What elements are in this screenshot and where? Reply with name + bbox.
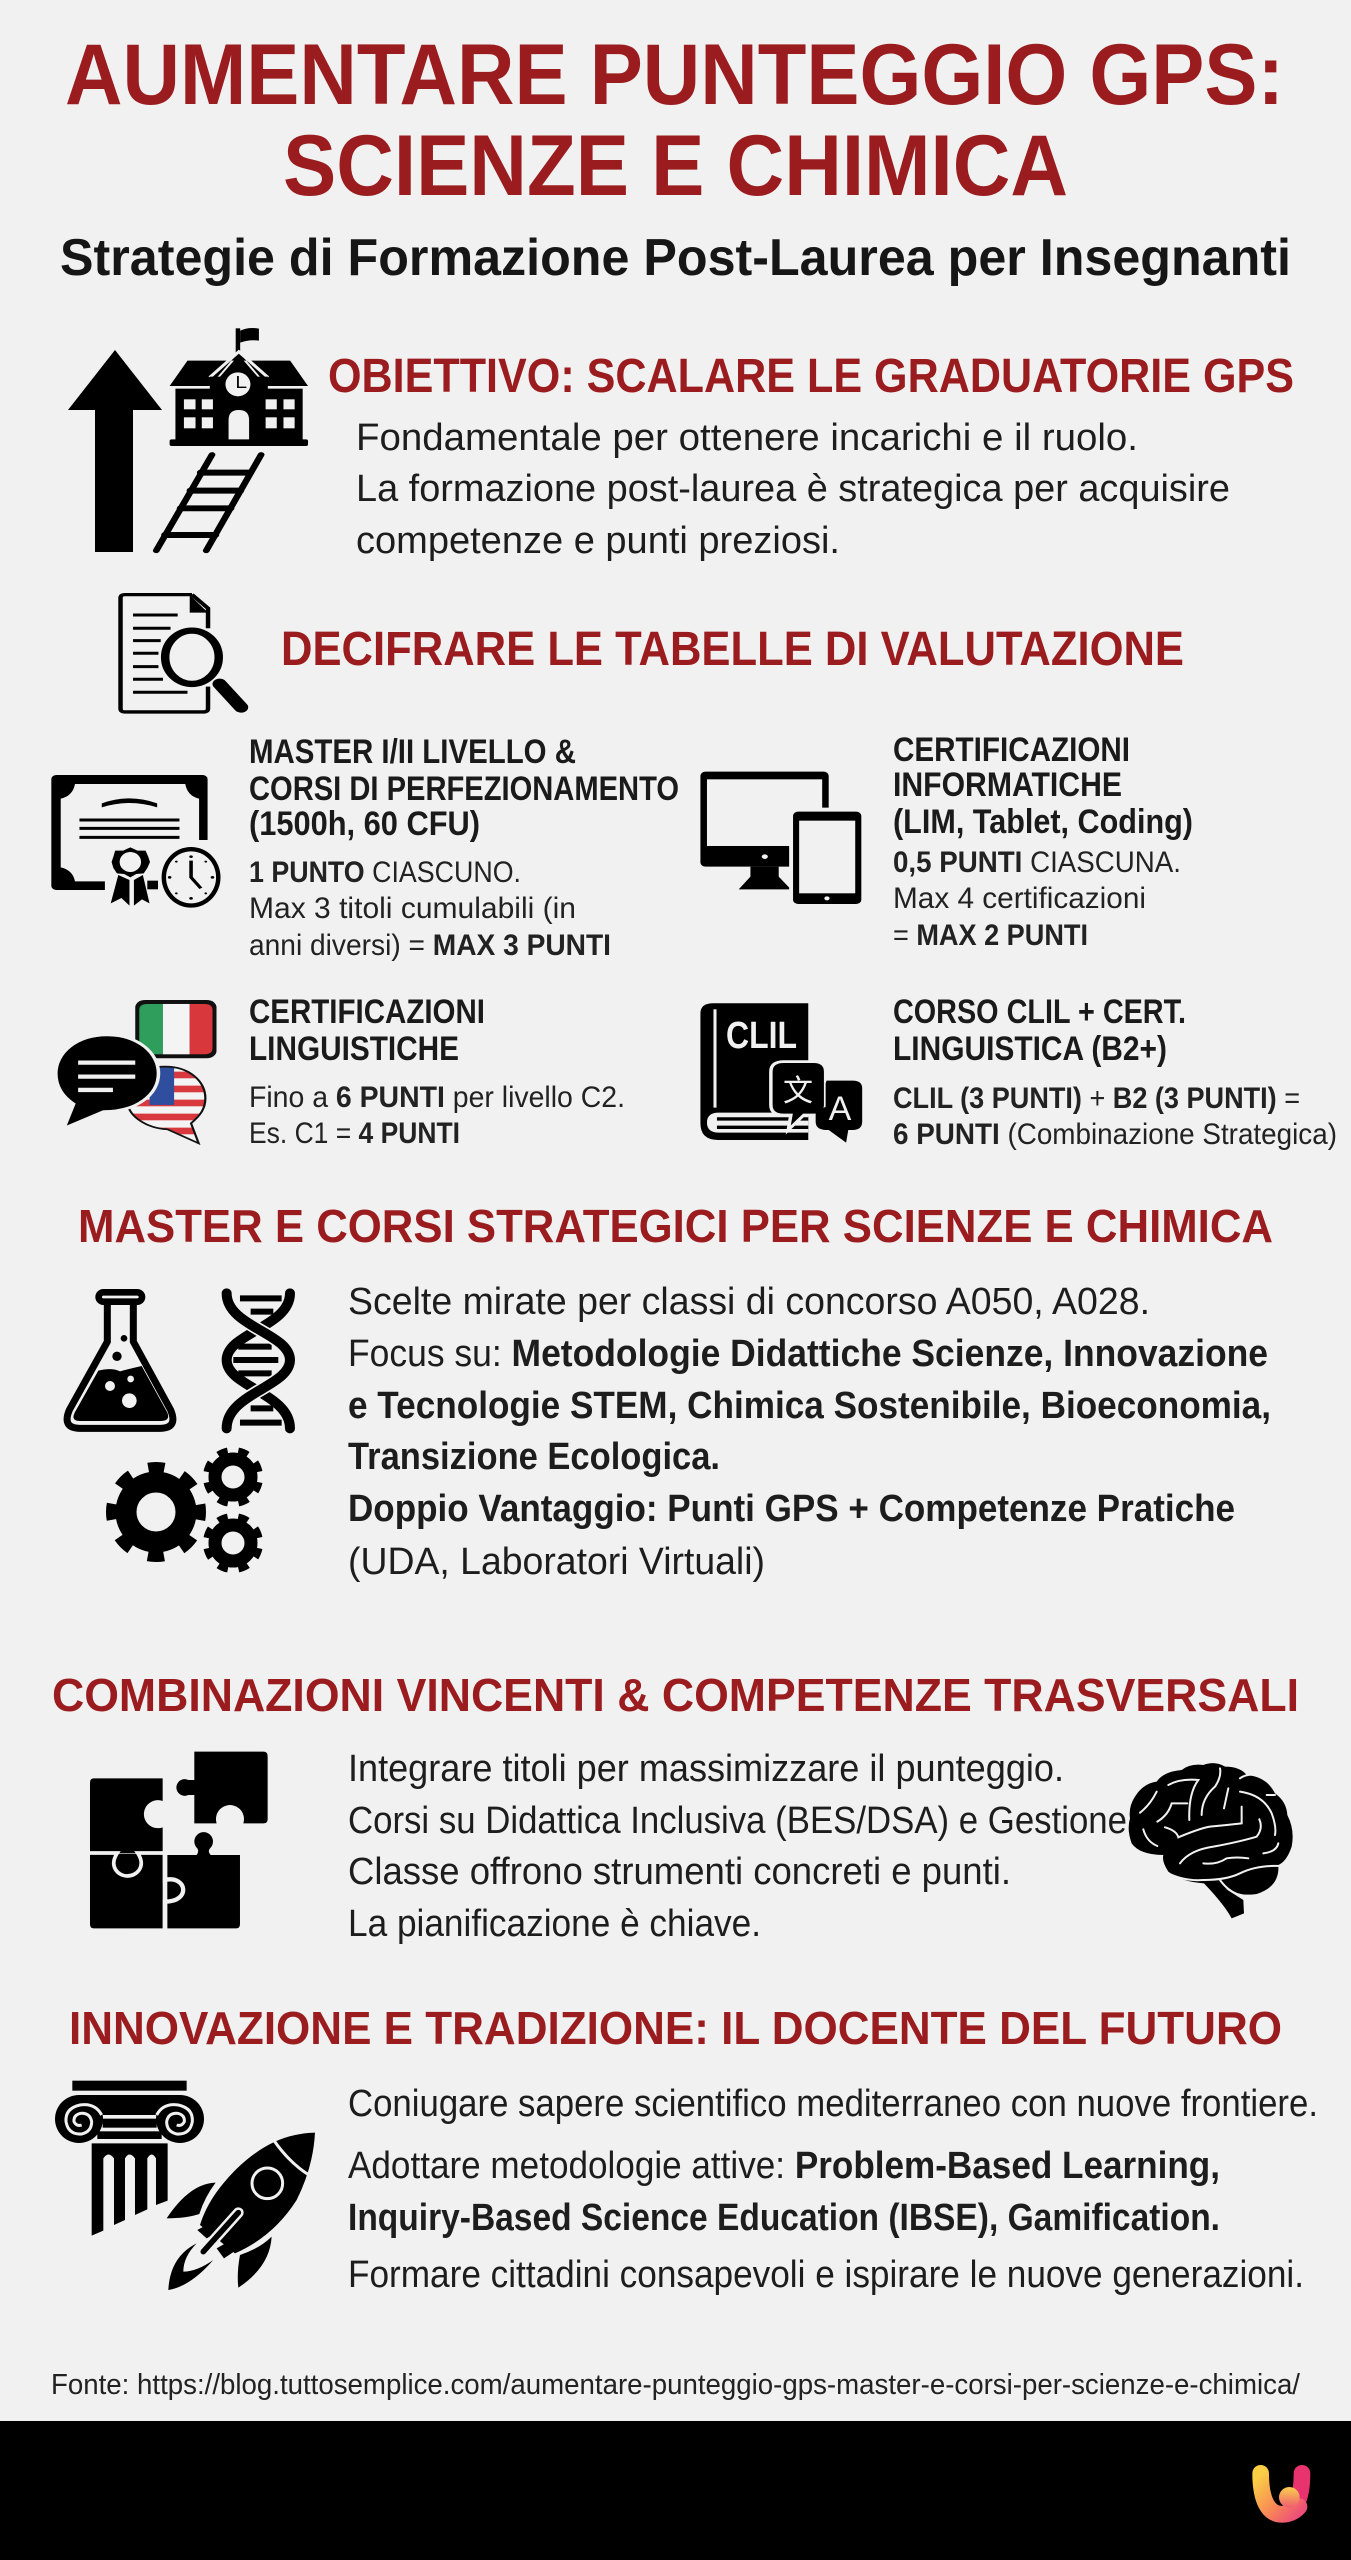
card text: linguistiche — [249, 1081, 625, 1150]
card text: master: 1 PUNTO CIASCUNO. — [249, 856, 521, 889]
card title: master: MASTER I/II LIVELLO & — [249, 733, 576, 771]
text block: combinazioni — [348, 1748, 1127, 1945]
card: corso clil — [700, 993, 1337, 1151]
source line: Fonte: https://blog.tuttosemplice.com/aumentare-punteggio-gps-master-e-corsi-per-scienze-e-chimica/ — [51, 2369, 1301, 2401]
text block: combinazioni: Classe offrono strumenti concreti e punti. — [348, 1851, 1011, 1893]
heading: innovazione: INNOVAZIONE E TRADIZIONE: IL DOCENTE DEL FUTURO — [69, 2002, 1282, 2054]
card title: linguistiche: LINGUISTICHE — [249, 1030, 459, 1068]
text block: combinazioni: Integrare titoli per massimizzare il punteggio. — [348, 1748, 1064, 1790]
text block: innovazione: Adottare metodologie attive: Problem-Based Learning, — [348, 2145, 1220, 2187]
card title: informatiche: INFORMATICHE — [893, 766, 1122, 804]
heading: master e corsi: MASTER E CORSI STRATEGICI PER SCIENZE E CHIMICA — [78, 1200, 1273, 1252]
icon: CLIL book with translation bubbles: 文 — [783, 1075, 813, 1108]
card title: informatiche — [893, 731, 1193, 841]
icon: puzzle — [90, 1752, 268, 1930]
card: certificazioni linguistiche — [56, 993, 625, 1150]
text block: master e corsi: Focus su: Metodologie Didattiche Scienze, Innovazione — [348, 1333, 1268, 1375]
card title: clil: CORSO CLIL + CERT. — [893, 993, 1186, 1031]
card title: clil — [893, 993, 1186, 1068]
card text: informatiche: = MAX 2 PUNTI — [893, 919, 1088, 952]
card: certificazioni informatiche — [700, 731, 1193, 952]
icon: flask — [67, 1292, 173, 1428]
text block: innovazione: Inquiry-Based Science Education (IBSE), Gamification. — [348, 2197, 1220, 2239]
panel: master e corsi strategici — [67, 1200, 1273, 1583]
card title: master: (1500h, 60 CFU) — [249, 805, 480, 843]
title: SCIENZE E CHIMICA — [283, 118, 1068, 214]
card text: informatiche — [893, 846, 1181, 952]
panel: combinazioni vincenti — [52, 1669, 1299, 1945]
card: master — [51, 733, 679, 962]
panel: tabelle di valutazione — [51, 595, 1337, 1151]
icon: school and ladder — [156, 328, 308, 551]
icon: monitor and tablet — [700, 772, 865, 908]
icon: document with magnifier — [121, 595, 241, 712]
text block: combinazioni: Corsi su Didattica Inclusiva (BES/DSA) e Gestione — [348, 1800, 1127, 1842]
panel: innovazione e tradizione — [55, 2002, 1318, 2296]
text block: obiettivo: Fondamentale per ottenere incarichi e il ruolo. — [356, 417, 1138, 459]
card title: linguistiche: CERTIFICAZIONI — [249, 993, 485, 1031]
card title: informatiche: (LIM, Tablet, Coding) — [893, 803, 1193, 841]
card title: linguistiche — [249, 993, 485, 1068]
icon: CLIL book with translation bubbles: CLIL — [726, 1015, 797, 1057]
icon: brain — [1129, 1763, 1293, 1918]
text block: master e corsi: (UDA, Laboratori Virtuali) — [348, 1541, 765, 1583]
icon: gears — [112, 1443, 267, 1577]
card title: master — [249, 733, 679, 843]
heading: combinazioni: COMBINAZIONI VINCENTI & COMPETENZE TRASVERSALI — [52, 1669, 1299, 1721]
text block: obiettivo: La formazione post-laurea è strategica per acquisire — [356, 468, 1230, 510]
card text: master: anni diversi) = MAX 3 PUNTI — [249, 929, 611, 962]
footer bar — [0, 2421, 1351, 2560]
icon: rocket — [167, 2133, 315, 2290]
subtitle: Strategie di Formazione Post-Laurea per Insegnanti — [60, 229, 1291, 287]
text block: master e corsi — [348, 1281, 1271, 1583]
card text: clil: CLIL (3 PUNTI) + B2 (3 PUNTI) = — [893, 1082, 1300, 1115]
text block: master e corsi: e Tecnologie STEM, Chimica Sostenibile, Bioeconomia, — [348, 1385, 1271, 1427]
icon: CLIL book with translation bubbles — [700, 1003, 862, 1143]
card text: linguistiche: Es. C1 = 4 PUNTI — [249, 1117, 460, 1150]
card text: linguistiche: Fino a 6 PUNTI per livello C2. — [249, 1081, 625, 1114]
icon: certificate and clock — [51, 775, 221, 911]
text block: obiettivo: competenze e punti preziosi. — [356, 520, 840, 562]
card text: informatiche: 0,5 PUNTI CIASCUNA. — [893, 846, 1181, 879]
card text: clil — [893, 1082, 1337, 1151]
card text: master: Max 3 titoli cumulabili (in — [249, 892, 576, 925]
text block: obiettivo — [356, 417, 1230, 562]
title — [65, 27, 1284, 214]
text block: combinazioni: La pianificazione è chiave. — [348, 1903, 761, 1945]
icon: flags and speech bubbles — [56, 1000, 217, 1145]
icon: logo — [1261, 2473, 1302, 2514]
text block: master e corsi: Transizione Ecologica. — [348, 1436, 720, 1478]
text block: innovazione: Formare cittadini consapevoli e ispirare le nuove generazioni. — [348, 2254, 1304, 2296]
text block: master e corsi: Scelte mirate per classi di concorso A050, A028. — [348, 1281, 1150, 1323]
icon: ionic column — [55, 2081, 204, 2236]
card text: master — [249, 856, 611, 962]
title: AUMENTARE PUNTEGGIO GPS: — [65, 27, 1284, 123]
card title: informatiche: CERTIFICAZIONI — [893, 731, 1130, 769]
icon: CLIL book with translation bubbles: A — [829, 1090, 852, 1128]
card title: clil: LINGUISTICA (B2+) — [893, 1030, 1167, 1068]
text block: master e corsi: Doppio Vantaggio: Punti GPS + Competenze Pratiche — [348, 1488, 1235, 1530]
card title: master: CORSI DI PERFEZIONAMENTO — [249, 770, 679, 808]
card text: informatiche: Max 4 certificazioni — [893, 882, 1146, 915]
heading: tabelle: DECIFRARE LE TABELLE DI VALUTAZIONE — [281, 623, 1184, 676]
icon: arrow up — [68, 350, 162, 552]
panel: obiettivo — [68, 328, 1294, 562]
icon: dna — [227, 1293, 290, 1428]
card text: clil: 6 PUNTI (Combinazione Strategica) — [893, 1118, 1337, 1151]
text block: innovazione — [348, 2083, 1318, 2296]
